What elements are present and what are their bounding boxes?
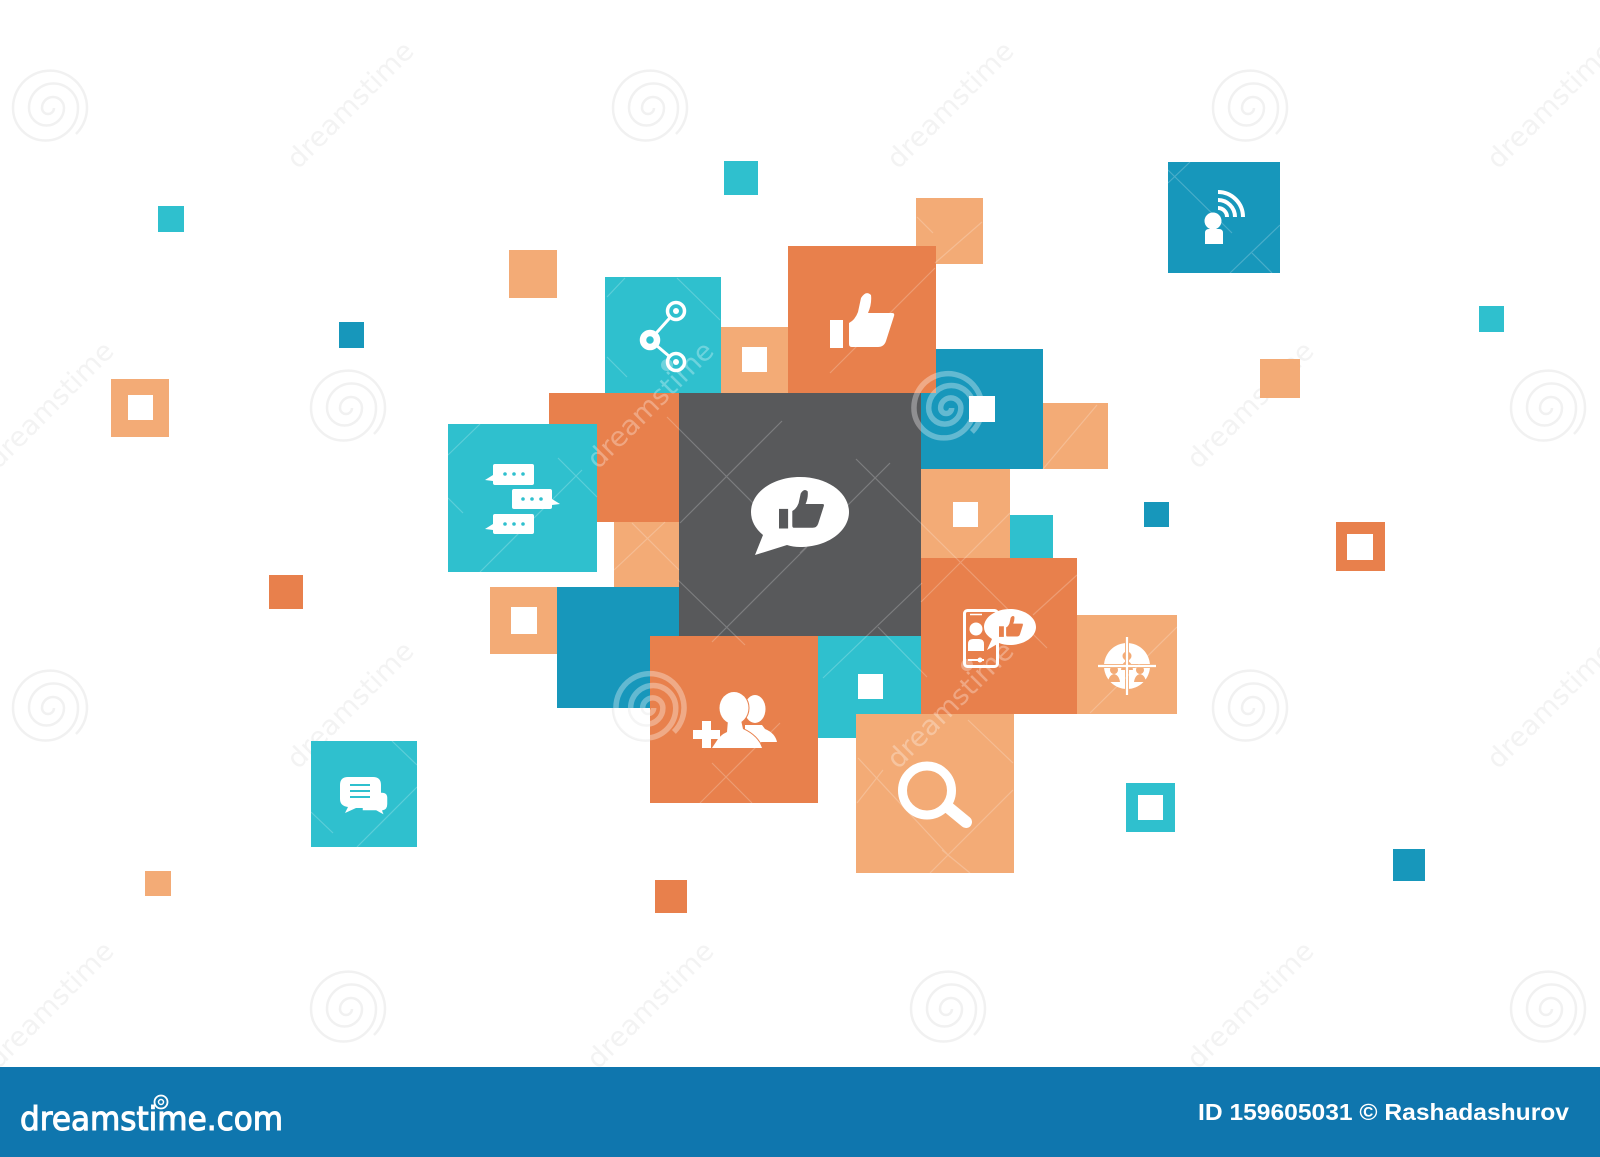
panel: peach tile with square <box>921 469 1010 558</box>
framed square: teal right <box>1126 783 1175 832</box>
watermark overlay on tiles: dreamstime <box>581 336 720 475</box>
panel: conversation tile <box>448 424 597 572</box>
panel: peach tile top <box>721 327 788 393</box>
watermark layer on white: dreamstime <box>1181 936 1320 1075</box>
panel: target tile <box>1077 615 1177 714</box>
icon: conversation bubbles <box>485 464 560 534</box>
watermark layer on white: dreamstime <box>581 936 720 1075</box>
icon: magnifying glass <box>902 766 966 822</box>
watermark overlay on tiles <box>581 336 1020 775</box>
panel: signal user tile <box>1168 162 1280 273</box>
panel: central dark tile <box>679 393 921 636</box>
icon: phone with like bubble <box>964 609 1036 666</box>
watermark layer on white: dreamstime <box>1181 336 1320 475</box>
panel: peach tile far top <box>916 198 983 264</box>
watermark layer on white: dreamstime <box>281 36 420 175</box>
footer logo: dreamstime.com <box>20 1099 283 1138</box>
footer bar <box>0 1067 1600 1157</box>
panel: search tile <box>856 714 1014 873</box>
panel: phone like tile <box>921 558 1077 714</box>
panel: peach tile lower left <box>490 587 557 654</box>
icon: speech bubble with thumbs up <box>751 477 849 555</box>
panel: orange tile behind chat <box>549 393 679 522</box>
panel: thumbs up tile <box>788 246 936 393</box>
panel: blue tile lower left <box>557 587 679 708</box>
framed square: peach left <box>111 379 169 437</box>
panel: teal share tile <box>605 277 721 393</box>
icon: user broadcasting <box>1204 192 1243 244</box>
footer credit: ID 159605031 © Rashadashurov <box>1198 1099 1569 1125</box>
panel: message tile <box>311 741 417 847</box>
framed square: orange right <box>1336 522 1385 571</box>
watermark overlay on tiles: dreamstime <box>881 636 1020 775</box>
scattered small squares <box>145 161 1504 913</box>
panel: blue tile right <box>921 349 1043 469</box>
panel: small teal tile <box>1010 515 1053 558</box>
icon: audience target <box>1098 637 1156 695</box>
icon: thumbs up <box>830 293 894 348</box>
panel: teal tile bottom <box>818 636 921 738</box>
watermark lattice lines <box>311 162 1280 873</box>
panel: peach tile under orange <box>614 522 679 587</box>
icon: add people <box>693 692 777 748</box>
panel: add user tile <box>650 636 818 803</box>
watermark layer on white: dreamstime <box>881 36 1020 175</box>
panel: peach tile right <box>1043 403 1108 469</box>
watermark layer on white: dreamstime <box>281 636 420 775</box>
icon: chat bubbles <box>340 777 388 816</box>
icon: share nodes <box>643 302 684 370</box>
